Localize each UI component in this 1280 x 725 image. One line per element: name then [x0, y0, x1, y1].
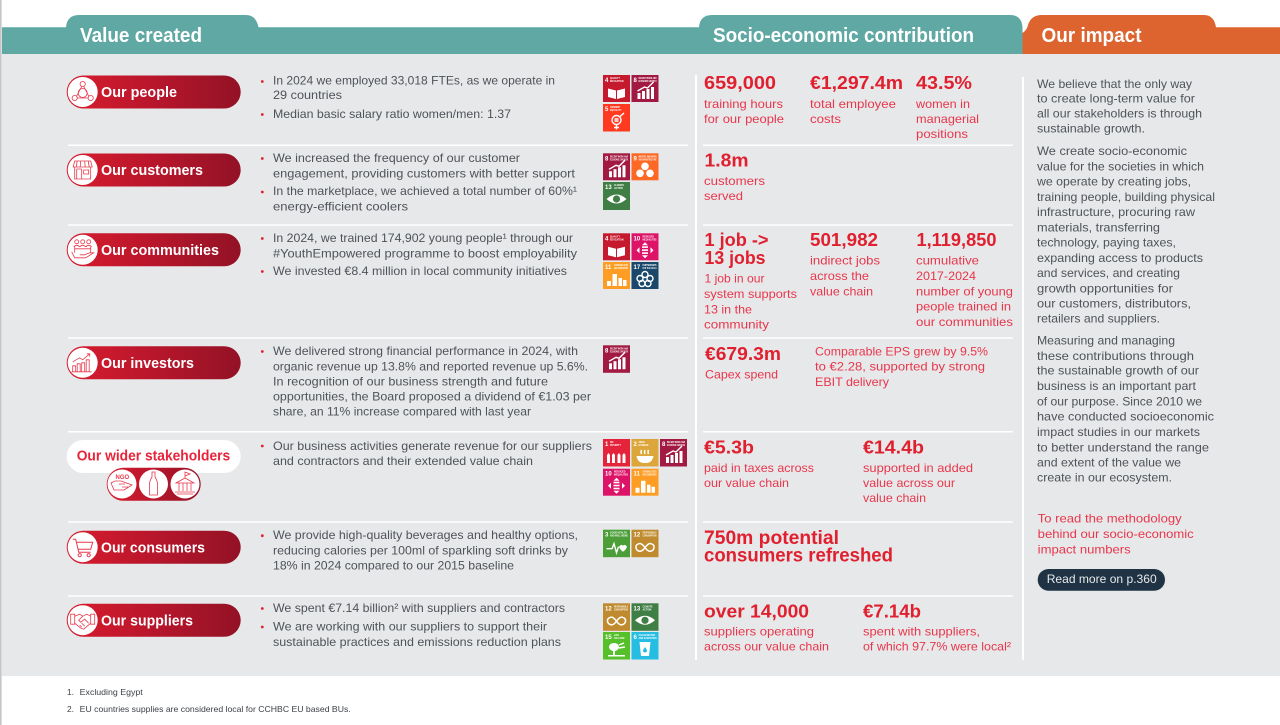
text: socio-economic value: We create socio-economic [1037, 144, 1187, 158]
SDG icons: suppliers [603, 603, 658, 660]
SDG icons: communities: INEQUALITIES [642, 238, 657, 241]
SDG icons: communities: QUALITY [610, 235, 621, 238]
text: measuring and managing: create in our ecosystem. [1037, 471, 1172, 485]
SDG icons: people: EDUCATION [610, 80, 624, 83]
icon: people network [72, 81, 93, 101]
text: measuring and managing: of our purpose. Since 2010 we [1037, 394, 1202, 408]
SDG icons: customers [603, 153, 658, 210]
SDG icons: stakeholders: REDUCED [614, 472, 626, 474]
text: investors bullets: organic revenue up 13.8% and reported revenue up 5.6%. [273, 359, 588, 373]
metric: EPS growth: to €2.28, supported by strong [815, 360, 985, 374]
text: methodology link: To read the methodology [1038, 512, 1182, 526]
pill: Our communities: Our communities [101, 243, 219, 259]
metric: supplier spend [863, 601, 1011, 654]
text: investors bullets: In recognition of our business strength and future [273, 374, 548, 388]
text: measuring and managing: these contributions through [1037, 349, 1194, 363]
SDG icons: suppliers: CLIMATE [642, 605, 653, 608]
icon: NGO hands: NGO [116, 475, 130, 481]
metric: training hours [704, 73, 784, 126]
SDG icons: stakeholders: ECONOMIC GROWTH [667, 445, 685, 447]
row: our suppliers [67, 601, 1011, 660]
text: measuring and managing: to better understand the range [1037, 440, 1209, 454]
SDG icons: stakeholders: AND COMMUNITIES [642, 474, 657, 477]
SDG icons: people: 4 [605, 78, 609, 84]
text: people bullets [261, 74, 555, 121]
text: customers bullets [261, 151, 577, 214]
metric: women managers: 43.5% [916, 73, 972, 93]
pill: Our wider stakeholders [67, 440, 241, 501]
text: communities bullets: #YouthEmpowered programme to boost employability [273, 246, 577, 260]
metric: suppliers operating: across our value chain [704, 640, 829, 654]
row: our consumers [67, 528, 893, 572]
SDG icons: consumers: GOOD HEALTH [610, 532, 627, 535]
metric: EPS growth: EBIT delivery [815, 375, 889, 389]
SDG icons: communities: 4 [605, 236, 609, 242]
pill: Our investors [67, 346, 241, 379]
text: customers bullets: We increased the frequency of our customer [273, 151, 520, 165]
metric: jobs multiplier: 1 job -> [704, 230, 768, 250]
metric: employee costs [810, 73, 903, 126]
SDG icons: investors: DECENT WORK AND [610, 347, 628, 350]
metric: EPS growth: Comparable EPS grew by 9.5% [815, 344, 988, 358]
metric: added value: value chain [863, 491, 926, 505]
SDG icons: stakeholders: 8 [662, 442, 666, 448]
text: methodology link: behind our socio-economic [1038, 527, 1194, 541]
pill: Our people [67, 76, 241, 108]
text: investors bullets [261, 344, 591, 418]
SDG icons: stakeholders: 10 [605, 472, 612, 478]
SDG icons: customers: AND INFRASTRUCTURE [638, 158, 657, 161]
SDG icons: stakeholders: 1 [605, 442, 609, 448]
SDG icons: communities: PARTNERSHIPS [642, 264, 657, 267]
row: our customers [67, 151, 765, 214]
footnotes: EU countries supplies are considered local for CCHBC EU based BUs. [80, 704, 351, 714]
icon: NGO hands [111, 475, 132, 490]
metric: consumers refreshed [704, 528, 893, 567]
text: investors bullets: We delivered strong financial performance in 2024, with [273, 344, 578, 358]
heading: Value created [2, 15, 699, 54]
row: our people [67, 73, 979, 141]
SDG icons: communities: 17 [634, 265, 641, 271]
metric: young people trained: number of young [916, 284, 1013, 298]
SDG icons: suppliers: 13 [634, 606, 641, 612]
SDG icons: customers: ACTION [614, 187, 623, 190]
SDG icons: customers: 8 [605, 156, 609, 162]
SDG icons: communities: FOR THE GOALS [642, 267, 657, 270]
text: socio-economic value: expanding access to products [1037, 251, 1203, 265]
SDG icons: stakeholders: 2 [634, 442, 638, 448]
pill: Our consumers [67, 531, 241, 564]
text: suppliers bullets: We spent €7.14 billion² with suppliers and contractors [273, 601, 565, 615]
metric: young people trained: 2017-2024 [916, 269, 976, 283]
SDG icons: people: EQUALITY [610, 109, 622, 112]
metric: suppliers operating [704, 601, 829, 654]
SDG icons: stakeholders: POVERTY [610, 445, 621, 447]
metric: jobs multiplier: community [704, 318, 769, 332]
text: communities bullets: We invested €8.4 million in local community initiatives [273, 264, 567, 278]
SDG icons: suppliers: 6 [634, 635, 638, 641]
metric: added value: €14.4b [863, 437, 924, 457]
SDG icons: customers: INDUSTRY, INNOVATION [638, 155, 657, 158]
text: stakeholders bullets: Our business activities generate revenue for our suppliers [273, 439, 592, 453]
metric: jobs multiplier [704, 230, 797, 332]
text: customers bullets: energy-efficient coolers [273, 200, 408, 214]
SDG icons: stakeholders: HUNGER [638, 445, 649, 447]
metric: women managers: managerial [916, 112, 979, 126]
text: methodology link [1038, 512, 1194, 556]
SDG icons: people [603, 75, 658, 132]
text: socio-economic value: infrastructure, procuring raw [1037, 205, 1195, 219]
icon: bottle [150, 472, 158, 495]
SDG icons: stakeholders: 11 [634, 472, 641, 478]
text: investors bullets: opportunities, the Board proposed a dividend of €1.03 per [273, 390, 591, 404]
text: consumers bullets: We provide high-quality beverages and healthy options, [273, 528, 578, 542]
button: read more: Read more on p.360 [1047, 572, 1157, 586]
SDG icons: people: ECONOMIC GROWTH [638, 81, 657, 83]
metric: consumers refreshed: consumers refreshed [704, 546, 893, 567]
heading: Our impact: Our impact [1042, 25, 1142, 47]
metric: jobs multiplier: 1 job in our [704, 272, 765, 286]
text: socio-economic value: value for the societies in which [1037, 159, 1204, 173]
heading: Our impact [1022, 15, 1280, 54]
text: measuring and managing: business is an important part [1037, 379, 1197, 393]
text: measuring and managing: the sustainable growth of our [1037, 363, 1199, 377]
SDG icons: investors [603, 345, 630, 373]
footnotes: 2. [67, 704, 74, 714]
metric: customers served [704, 151, 765, 203]
metric: added value: supported in added [863, 461, 973, 475]
SDG icons: consumers: 3 [605, 533, 609, 539]
SDG icons: consumers: AND WELL-BEING [610, 535, 628, 538]
metric: supplier spend: spent with suppliers, [863, 625, 980, 639]
SDG icons: communities [603, 233, 658, 289]
SDG icons: customers: DECENT WORK AND [610, 155, 628, 158]
header band [2, 15, 1280, 54]
metric: young people trained: cumulative [916, 254, 979, 268]
SDG icons: people: 5 [605, 107, 609, 113]
text: suppliers bullets [261, 601, 565, 649]
metric: taxes: €5.3b [704, 437, 754, 457]
SDG icons: consumers: RESPONSIBLE [642, 533, 657, 535]
heading: Socio-economic contribution [699, 15, 1022, 54]
metric: jobs multiplier: 13 jobs [704, 248, 766, 268]
pill: Our suppliers [67, 604, 241, 637]
text: people bullets: 29 countries [273, 88, 342, 102]
text: people bullets: In 2024 we employed 33,018 FTEs, as we operate in [273, 74, 555, 88]
text: socio-economic value [1036, 144, 1215, 326]
metric: young people trained: 1,119,850 [916, 230, 996, 250]
pill: Our wider stakeholders: Our wider stakeholders [77, 449, 230, 465]
pill: Our customers [67, 154, 241, 186]
text: socio-economic value: growth opportunities for [1037, 281, 1173, 295]
text: socio-economic value: training people, building physical [1037, 190, 1215, 204]
metric: suppliers operating: over 14,000 [704, 601, 809, 621]
SDG icons: suppliers: CONSUMPTION [614, 609, 628, 611]
metric: training hours: for our people [704, 112, 784, 126]
metric: women managers [915, 73, 979, 141]
pill: Our people: Our people [101, 85, 177, 101]
pill: Our suppliers: Our suppliers [101, 614, 193, 630]
metric: employee costs: €1,297.4m [810, 73, 903, 93]
text: people bullets: Median basic salary ratio women/men: 1.37 [273, 107, 511, 121]
SDG icons: stakeholders: ZERO [638, 442, 645, 444]
row: our communities [67, 230, 1013, 332]
text: measuring and managing [1037, 334, 1214, 485]
text: customers bullets: engagement, providing customers with better support [273, 166, 576, 180]
SDG icons: suppliers: 15 [605, 635, 612, 641]
metric: indirect jobs: value chain [810, 284, 873, 298]
heading: Socio-economic contribution: Socio-economic contribution [713, 25, 974, 47]
SDG icons: communities: AND COMMUNITIES [614, 267, 628, 270]
text: impact intro [1037, 77, 1202, 136]
metric: capex [705, 344, 781, 381]
SDG icons: stakeholders: NO [610, 442, 614, 444]
SDG icons: suppliers: 12 [605, 606, 612, 612]
SDG icons: stakeholders: INEQUALITIES [614, 474, 628, 477]
SDG icons: suppliers: LIFE [614, 635, 619, 637]
SDG icons: customers: ECONOMIC GROWTH [610, 159, 628, 161]
text: measuring and managing: have conducted socioeconomic [1037, 410, 1214, 424]
SDG icons: communities: 11 [605, 265, 612, 271]
SDG icons: suppliers: CLEAN WATER [638, 634, 656, 637]
SDG icons: people: DECENT WORK AND [638, 77, 657, 80]
metric: taxes [704, 437, 814, 490]
metric: women managers: women in [915, 97, 970, 111]
text: impact intro: We believe that the only way [1037, 77, 1192, 91]
SDG icons: stakeholders: SUSTAINABLE CITIES [642, 471, 657, 474]
footnotes [67, 687, 351, 714]
icon: handshake [71, 614, 95, 629]
text: stakeholders bullets: and contractors and their extended value chain [273, 454, 533, 468]
pill: Our customers: Our customers [101, 163, 203, 179]
text: consumers bullets: 18% in 2024 compared to our 2015 baseline [273, 558, 514, 572]
SDG icons: stakeholders [603, 439, 687, 496]
metric: jobs multiplier: 13 in the [704, 302, 752, 316]
text: consumers bullets [261, 528, 578, 572]
metric: young people trained [916, 230, 1013, 329]
left page edge [0, 0, 2, 725]
metric: jobs multiplier: system supports [704, 287, 797, 301]
metric: consumers refreshed: 750m potential [704, 528, 839, 549]
SDG icons: consumers: CONSUMPTION [642, 536, 657, 538]
SDG icons: stakeholders: DECENT WORK AND [667, 441, 685, 444]
text: socio-economic value: technology, paying taxes, [1037, 236, 1176, 250]
SDG icons: investors: 8 [605, 348, 609, 354]
row: our investors [67, 344, 988, 418]
SDG icons: communities: EDUCATION [610, 238, 624, 241]
SDG icons: people: GENDER [610, 107, 620, 109]
metric: young people trained: our communities [916, 315, 1013, 329]
metric: added value [863, 437, 973, 505]
SDG icons: suppliers: AND SANITATION [638, 637, 657, 640]
metric: added value: value across our [863, 476, 955, 490]
metric: capex: €679.3m [705, 344, 781, 364]
metric: capex: Capex spend [705, 367, 778, 381]
text: suppliers bullets: We are working with our suppliers to support their [273, 620, 547, 634]
icon: community in hand [72, 240, 94, 258]
metric: employee costs: costs [810, 112, 841, 126]
metric: customers served: customers [704, 174, 765, 188]
panel: our impact [1036, 77, 1215, 591]
pill: Our investors: Our investors [101, 356, 194, 372]
row: our wider stakeholders [67, 437, 973, 505]
icon: store [73, 161, 92, 179]
metric: indirect jobs: 501,982 [810, 230, 878, 250]
text: measuring and managing: and extent of the value we [1037, 455, 1181, 469]
metric: women managers: positions [916, 127, 968, 141]
text: suppliers bullets: sustainable practices and emissions reduction plans [273, 635, 561, 649]
text: measuring and managing: Measuring and managing [1037, 334, 1175, 348]
SDG icons: communities: 10 [634, 236, 641, 242]
icon: government building [175, 472, 195, 494]
metric: young people trained: people trained in [916, 300, 1011, 314]
text: communities bullets: In 2024, we trained 174,902 young people¹ through our [273, 231, 573, 245]
text: impact intro: to create long-term value for [1037, 92, 1195, 106]
SDG icons: suppliers: ACTION [642, 608, 652, 611]
SDG icons: consumers: 12 [634, 533, 641, 539]
SDG icons: investors: ECONOMIC GROWTH [610, 351, 628, 353]
SDG icons: communities: REDUCED [642, 236, 654, 238]
SDG icons: customers: CLIMATE [614, 184, 625, 187]
column and row dividers [68, 75, 1024, 660]
text: impact intro: sustainable growth. [1037, 122, 1145, 136]
metric: indirect jobs: across the [810, 269, 869, 283]
text: socio-economic value: materials, transferring [1037, 220, 1160, 234]
text: socio-economic value: we operate by creating jobs, [1036, 175, 1191, 189]
metric: taxes: our value chain [704, 476, 789, 490]
metric: EPS growth [815, 344, 988, 389]
text: methodology link: impact numbers [1038, 542, 1131, 556]
text: socio-economic value: our customers, distributors, [1037, 297, 1191, 311]
icon: rising bars [72, 354, 92, 372]
SDG icons: customers: 13 [605, 185, 612, 191]
metric: training hours: 659,000 [704, 73, 776, 93]
footnotes: 1. [67, 687, 74, 697]
metric: indirect jobs [810, 230, 880, 298]
text: investors bullets: share, an 11% increase compared with last year [273, 404, 531, 418]
SDG icons: communities: SUSTAINABLE CITIES [614, 264, 628, 267]
metric: supplier spend: of which 97.7% were local² [863, 640, 1011, 654]
text: socio-economic value: and services, and creating [1037, 266, 1180, 280]
text: stakeholders bullets [261, 439, 592, 468]
metric: taxes: paid in taxes across [704, 461, 814, 475]
footnotes: Excluding Egypt [80, 687, 143, 697]
text: consumers bullets: reducing calories per 100ml of sparkling soft drinks by [273, 543, 568, 557]
SDG icons: customers: 9 [634, 156, 638, 162]
metric: customers served: 1.8m [704, 151, 748, 171]
metric: training hours: training hours [704, 97, 783, 111]
metric: indirect jobs: indirect jobs [810, 254, 880, 268]
pill: Our consumers: Our consumers [101, 540, 205, 556]
SDG icons: people: 8 [634, 78, 638, 84]
text: customers bullets: In the marketplace, we achieved a total number of 60%¹ [273, 184, 577, 198]
metric: supplier spend: €7.14b [863, 601, 921, 621]
text: impact intro: all our stakeholders is through [1037, 107, 1202, 121]
heading: Value created: Value created [80, 25, 202, 47]
text: communities bullets [261, 231, 577, 278]
metric: suppliers operating: suppliers operating [704, 625, 814, 639]
SDG icons: suppliers: ON LAND [614, 637, 625, 640]
metric: employee costs: total employee [810, 97, 896, 111]
metric: customers served: served [704, 189, 743, 203]
icon: shopping cart [73, 539, 93, 557]
SDG icons: suppliers: RESPONSIBLE [614, 606, 628, 608]
text: socio-economic value: retailers and suppliers. [1037, 312, 1160, 326]
button: read more [1038, 569, 1165, 591]
SDG icons: people: QUALITY [610, 77, 621, 80]
text: measuring and managing: impact studies in our markets [1037, 425, 1200, 439]
pill: Our communities [67, 233, 241, 266]
SDG icons: consumers [603, 530, 658, 557]
